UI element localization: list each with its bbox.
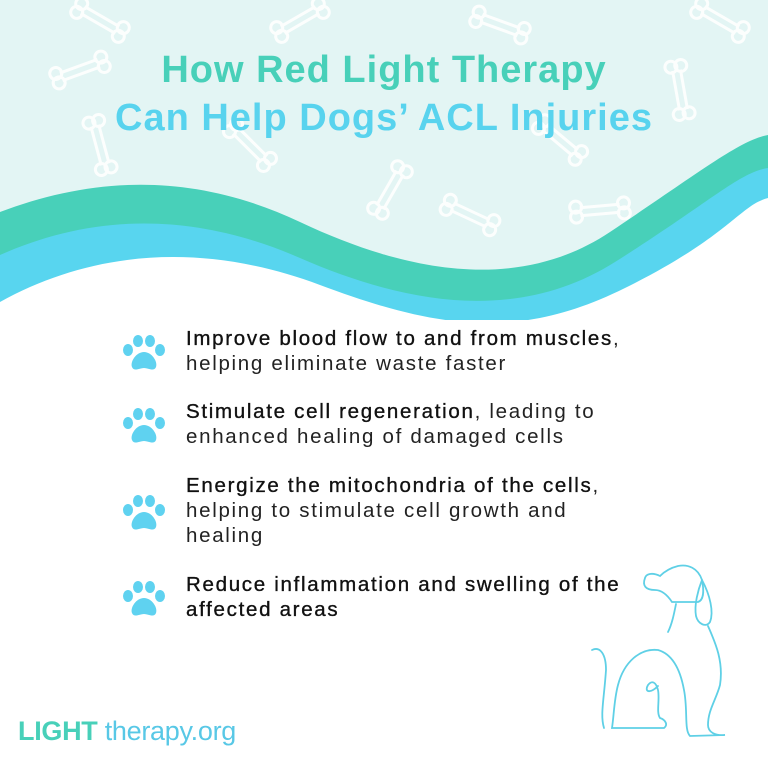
icon: paw 1: [123, 335, 165, 370]
text: item 4: Reduce inflammation and swelling of the: [186, 573, 620, 596]
icon: paw 2: [123, 408, 165, 442]
text: item 3: [186, 474, 600, 547]
title: Can Help Dogs’ ACL Injuries: [115, 97, 653, 139]
text: item 3: Energize the mitochondria of the cells,: [186, 474, 600, 497]
icon: paw 4: [123, 581, 165, 616]
title: How Red Light Therapy: [161, 49, 607, 91]
text: item 2: [186, 400, 595, 448]
text: item 3: helping to stimulate cell growth and: [186, 499, 567, 522]
text: item 1: helping eliminate waste faster: [186, 352, 507, 375]
background header with bones and wave: [0, 0, 768, 320]
text: item 3: healing: [186, 524, 264, 547]
text: item 2: enhanced healing of damaged cells: [186, 425, 565, 448]
text: item 1: Improve blood flow to and from muscles,: [186, 327, 620, 350]
text: item 2: Stimulate cell regeneration, leading to: [186, 400, 595, 423]
icon: dog line drawing: [591, 564, 726, 737]
logo: LIGHT therapy.org: [18, 716, 236, 746]
icon: paw 3: [123, 495, 165, 530]
title: [115, 49, 653, 139]
text: item 1: [186, 327, 620, 375]
text: item 4: affected areas: [186, 598, 339, 621]
text: item 4: [186, 573, 620, 621]
